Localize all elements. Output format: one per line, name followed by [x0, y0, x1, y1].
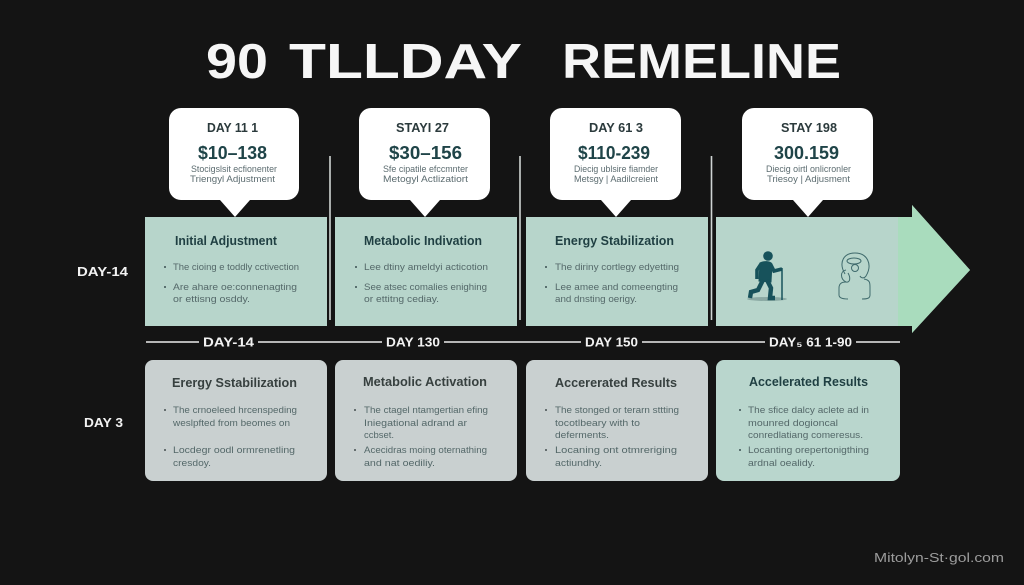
panel: metabolic indivation: Lee dtiny ameldyi acticotion: [364, 262, 488, 273]
card: metabolic activation: Metabolic Activation: [363, 374, 487, 389]
card: accererated results: actiundhy.: [555, 458, 602, 469]
card: accelerated results: Locanting orepertonigthing: [748, 445, 869, 456]
callout: day 11 1: [169, 108, 299, 217]
card: accererated results: [526, 360, 708, 481]
card: metabolic activation: The ctagel ntamgertian efing: [364, 405, 488, 416]
card: metabolic activation: [335, 360, 517, 481]
callout: stayi 27: [359, 108, 490, 217]
icon: walker with cane: [747, 251, 787, 301]
card: accelerated results: mounred dogioncal: [748, 418, 838, 429]
callout: stay 198: STAY 198: [781, 121, 837, 135]
callout: day 61 3: DAY 61 3: [589, 121, 643, 135]
panel: initial adjustment: The cioing e toddly cctivection: [173, 262, 299, 273]
panel: metabolic indivation: See atsec comalies enighing: [364, 282, 487, 293]
card: metabolic activation: and nat oediliy.: [364, 458, 435, 469]
title: [206, 35, 841, 89]
card: energy stabilization: cresdoy.: [173, 458, 211, 469]
panel: energy stabilization: [526, 217, 708, 326]
card: accelerated results: ardnal oealidy.: [748, 458, 815, 469]
icon: head outline: [839, 253, 870, 299]
title: 90: [206, 35, 268, 89]
card: accelerated results: The sfice dalcy aclete ad in: [748, 405, 869, 416]
title: REMELINE: [562, 35, 841, 89]
card: energy stabilization: The crnoeleed hrcenspeding: [173, 405, 297, 416]
callout: day 61 3: Metsgy | Aadilcreient: [574, 174, 658, 185]
timeline axis with day labels: [146, 334, 900, 350]
panel: initial adjustment: [145, 217, 327, 326]
card: energy stabilization: Erergy Sstabilization: [172, 375, 297, 390]
panel: initial adjustment: or ettisng osddy.: [173, 294, 250, 305]
card: energy stabilization: weslpfted from beomes on: [172, 418, 290, 429]
card: energy stabilization: Locdegr oodl ormrenetling: [173, 445, 295, 456]
callout: stayi 27: $30–156: [389, 143, 462, 163]
callout: day 11 1: $10–138: [198, 143, 267, 163]
card: metabolic activation: Acecidras moing oternathing: [364, 445, 487, 456]
card: metabolic activation: Iniegational adrand ar: [364, 418, 467, 429]
callout: day 61 3: [550, 108, 681, 217]
callout: stayi 27: Sfe cipatile efccmnter: [383, 164, 468, 175]
vertical dividers: [330, 156, 712, 320]
callout: stay 198: Triesoy | Adjusment: [767, 174, 850, 185]
card: accererated results: tocotlbeary with to: [555, 418, 640, 429]
panel: metabolic indivation: [335, 217, 517, 326]
callout: day 61 3: Diecig ublsire fiamder: [574, 164, 658, 175]
title: TLLDAY: [289, 35, 522, 89]
card: accererated results: Locaning ont otmreriging: [555, 445, 677, 456]
panel: energy stabilization: Lee amee and comeengting: [555, 282, 678, 293]
card: metabolic activation: ccbset.: [364, 430, 394, 441]
card: accelerated results: [716, 360, 900, 481]
panel: initial adjustment: Initial Adjustment: [175, 233, 278, 248]
callout: day 61 3: $110-239: [578, 143, 650, 163]
panel: energy stabilization: and dnsting oerigy.: [555, 294, 637, 305]
card: accererated results: Accererated Results: [555, 375, 677, 390]
card: accererated results: deferments.: [555, 430, 609, 441]
callout: day 11 1: Stocigslsit ecfionenter: [191, 164, 277, 175]
card: accelerated results: Accelerated Results: [749, 374, 868, 389]
timeline axis with day labels: DAY-14: [203, 334, 255, 350]
card: energy stabilization: [145, 360, 327, 481]
watermark: Mitolyn-St·gol.com: [874, 550, 1004, 565]
panel: metabolic indivation: or ettitng cediay.: [364, 294, 439, 305]
callout: stay 198: 300.159: [774, 143, 839, 163]
card: accelerated results: conredlatiang comeresus.: [748, 430, 863, 441]
callout: stayi 27: STAYI 27: [396, 121, 449, 135]
left label: day-14: DAY-14: [77, 264, 129, 279]
timeline axis with day labels: DAY₅ 61 1-90: [769, 334, 852, 350]
callout: stay 198: Diecig oirtl onlicronler: [766, 164, 851, 175]
panel: energy stabilization: The diriny cortlegy edyetting: [555, 262, 679, 273]
panel: metabolic indivation: Metabolic Indivation: [364, 233, 482, 248]
panel: energy stabilization: Energy Stabilization: [555, 233, 674, 248]
timeline axis with day labels: DAY 150: [585, 334, 638, 350]
callout: stay 198: [742, 108, 873, 217]
card: accererated results: The stonged or terarn sttting: [555, 405, 679, 416]
timeline axis with day labels: DAY 130: [386, 334, 440, 350]
panel: initial adjustment: Are ahare oe:connenagting: [173, 282, 297, 293]
timeline arrow: [716, 205, 970, 333]
left label: day 3: DAY 3: [84, 415, 123, 430]
callout: stayi 27: Metogyl Actlizatiort: [383, 174, 468, 185]
callout: day 11 1: Triengyl Adjustment: [190, 174, 275, 185]
callout: day 11 1: DAY 11 1: [207, 121, 258, 135]
